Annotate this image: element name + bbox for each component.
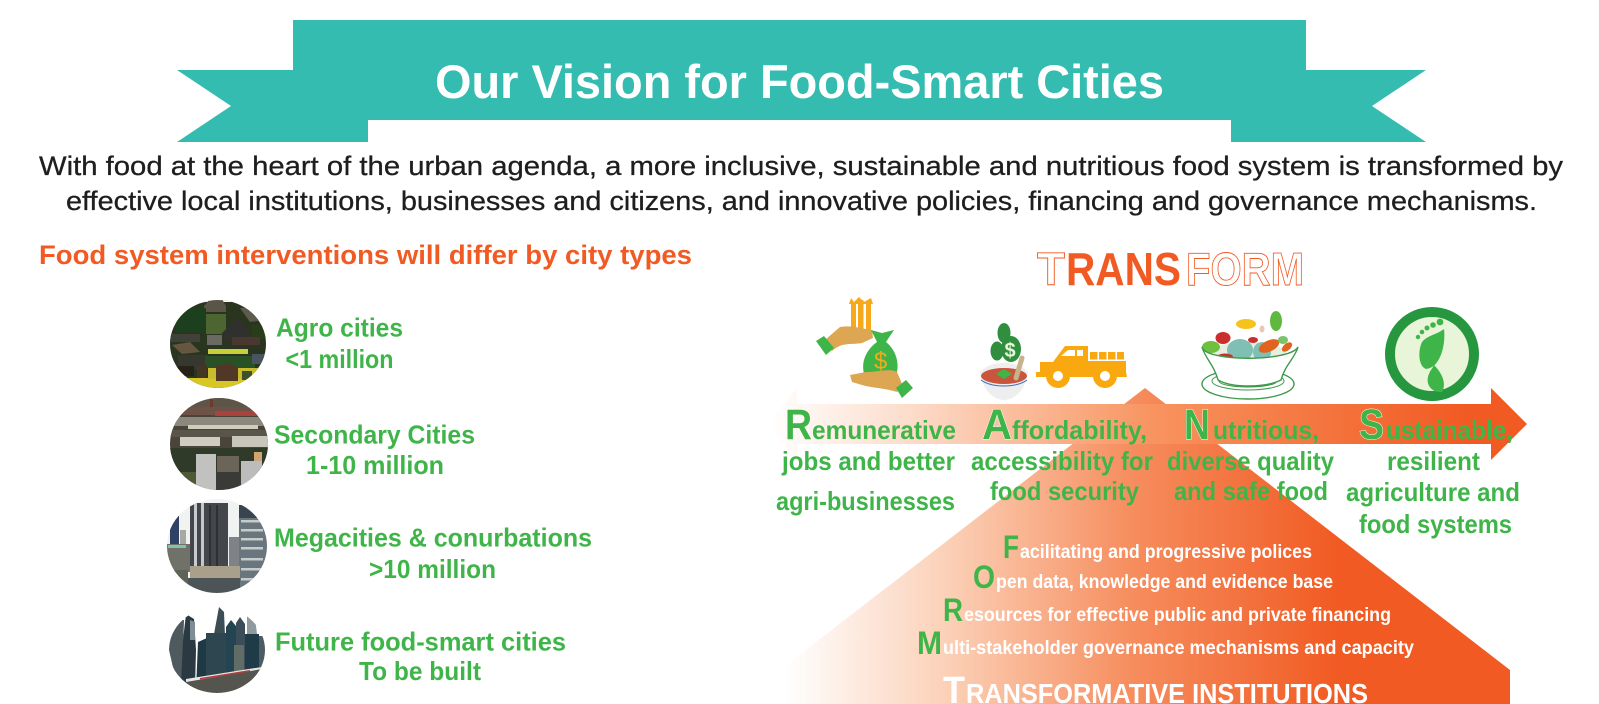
pillar: nutritious [1167, 401, 1334, 506]
item: facilitating policies: F [1003, 529, 1019, 565]
foot leaf [1419, 329, 1444, 369]
icon: truck [1036, 346, 1127, 388]
icon: soup and dollars [980, 323, 1028, 400]
banner left tail [177, 70, 368, 142]
salad [1202, 311, 1294, 364]
panel: city types [165, 296, 592, 695]
pillar: nutritious: utritious, [1213, 415, 1319, 445]
pillar: sustainable: resilient [1387, 446, 1480, 476]
item: open data: pen data, knowledge and evidence base [996, 571, 1333, 593]
pillar: sustainable: agriculture and [1346, 477, 1520, 507]
title banner [177, 20, 1426, 142]
toes [1416, 319, 1443, 339]
pillar: remunerative: R [785, 401, 812, 449]
banner right tail [1231, 70, 1426, 142]
title: Our Vision for Food-Smart Cities [435, 55, 1164, 108]
photo: future city [169, 607, 265, 693]
banner body [293, 20, 1306, 120]
label: agro cities: <1 million [286, 344, 394, 374]
label: secondary cities [274, 420, 475, 480]
label: secondary cities: Secondary Cities [274, 420, 475, 450]
heading: TRANSFORM: FORM [1186, 243, 1304, 295]
lower hand [850, 370, 903, 392]
item: multi-stakeholder: ulti-stakeholder governance mechanisms and capacity [943, 637, 1414, 659]
item: resources: esources for effective public and private financing [964, 604, 1391, 626]
pillar: affordability: ffordability, [1012, 415, 1147, 445]
label: future food-smart cities: Future food-smart cities [275, 626, 566, 656]
item: open data: O [973, 559, 995, 595]
photo: megacity [165, 497, 270, 595]
wheat [849, 297, 873, 334]
heading: TRANSFORM: RANS [1066, 243, 1181, 295]
pillar: affordability [971, 401, 1153, 506]
garnish [996, 369, 1012, 379]
soup [981, 368, 1027, 384]
label: future food-smart cities [275, 626, 566, 686]
pillar: nutritious: diverse quality [1167, 446, 1334, 476]
pillar: affordability: accessibility for [971, 446, 1153, 476]
panel: FORM pillars [917, 529, 1414, 704]
pillar: nutritious: N [1184, 401, 1210, 449]
icon: hands exchanging wheat and money [816, 297, 913, 398]
pyramid: transformative institutions [785, 388, 1510, 704]
pillar: remunerative: jobs and better [781, 446, 955, 476]
plate [1202, 369, 1294, 399]
spoon [1016, 358, 1022, 378]
lower cuff [896, 380, 913, 398]
panel: TRANS pillars [776, 401, 1520, 539]
upper cuff [816, 336, 834, 355]
vision statement [39, 151, 1564, 216]
pillar: sustainable: food systems [1359, 509, 1512, 539]
pillar: affordability: food security [990, 476, 1139, 506]
photo: secondary city [170, 398, 268, 490]
label: megacities: >10 million [369, 554, 496, 584]
label: megacities [274, 522, 592, 584]
heading: TRANSFORM: T [1037, 243, 1065, 295]
money bag [863, 330, 898, 377]
heel leaf [1428, 365, 1444, 392]
label: agro cities [276, 312, 403, 374]
label: agro cities: Agro cities [276, 312, 403, 342]
pillar: sustainable: S [1359, 401, 1384, 449]
label: megacities: Megacities & conurbations [274, 522, 592, 552]
pillar: nutritious: and safe food [1174, 476, 1328, 506]
arrow: two-way food system band [767, 388, 1527, 460]
pillar: remunerative: agri-businesses [776, 486, 955, 516]
upper hand [825, 326, 873, 351]
pillar: sustainable [1346, 401, 1520, 539]
photo: agro city [170, 300, 266, 388]
pillar: affordability: A [982, 401, 1012, 449]
dollar leaves [990, 323, 1021, 362]
item: multi-stakeholder: M [917, 625, 942, 661]
left heading: Food system interventions will differ by city types [39, 240, 692, 270]
pillar: remunerative [776, 401, 956, 516]
item: facilitating policies: acilitating and progressive polices [1020, 541, 1312, 563]
pillar: remunerative: emunerative [812, 415, 956, 445]
item: resources: R [943, 592, 963, 628]
bowl rim [981, 380, 1027, 386]
ring [1390, 312, 1474, 396]
icon: leaf footprint [1390, 312, 1474, 396]
vision statement: With food at the heart of the urban agenda, a more inclusive, sustainable and nutritious food system is transformed by [39, 151, 1564, 181]
label: secondary cities: 1-10 million [306, 450, 444, 480]
label: future food-smart cities: To be built [359, 656, 481, 686]
bowl [1202, 347, 1298, 386]
bowl [980, 363, 1028, 400]
pillar: sustainable: ustainable, [1386, 415, 1513, 445]
icon: salad bowl [1202, 311, 1298, 399]
vision statement: effective local institutions, businesses and citizens, and innovative policies, financing and governance mechanisms. [66, 186, 1537, 216]
dollar sign: $ [874, 348, 887, 375]
dollar sign: $ [1004, 340, 1016, 362]
